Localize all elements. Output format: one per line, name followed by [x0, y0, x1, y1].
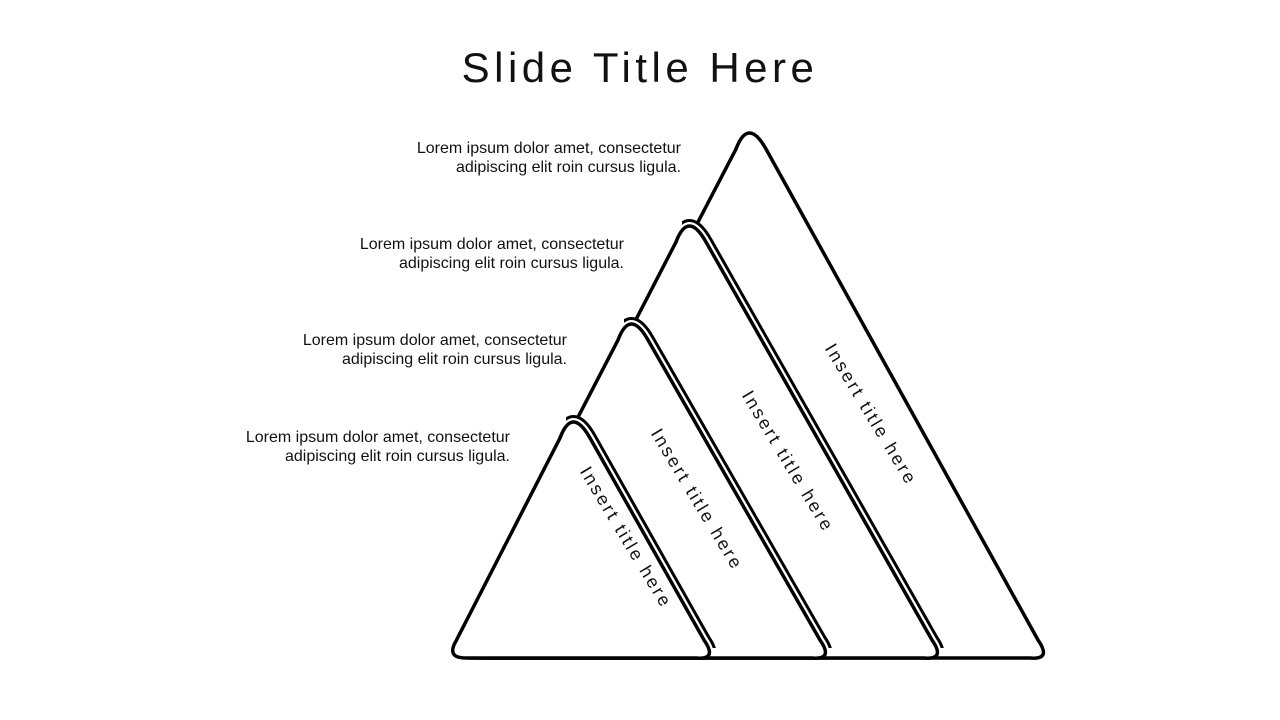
text block 4: Lorem ipsum dolor amet, consectetur	[246, 429, 510, 446]
text block 1: adipiscing elit roin cursus ligula.	[456, 159, 681, 176]
layer 1 (front): Insert title here	[576, 463, 676, 612]
title: Slide Title Here	[462, 44, 818, 91]
pyramid chart	[450, 131, 1046, 660]
text block 4: adipiscing elit roin cursus ligula.	[285, 448, 510, 465]
layer 2	[458, 324, 825, 658]
layer 3	[466, 226, 937, 658]
text block 1: Lorem ipsum dolor amet, consectetur	[417, 140, 681, 157]
text block 3: Lorem ipsum dolor amet, consectetur	[303, 332, 567, 349]
layer 3: Insert title here	[738, 387, 838, 536]
text block 3: adipiscing elit roin cursus ligula.	[342, 351, 567, 368]
text block 3	[303, 332, 567, 368]
layer 2: Insert title here	[647, 425, 747, 574]
text block 2: adipiscing elit roin cursus ligula.	[399, 255, 624, 272]
layer 1 (front)	[453, 422, 709, 658]
layer 4 (back): Insert title here	[821, 340, 921, 489]
text block 2	[360, 236, 624, 272]
text block 1	[417, 140, 681, 176]
text block 2: Lorem ipsum dolor amet, consectetur	[360, 236, 624, 253]
text block 4	[246, 429, 510, 465]
